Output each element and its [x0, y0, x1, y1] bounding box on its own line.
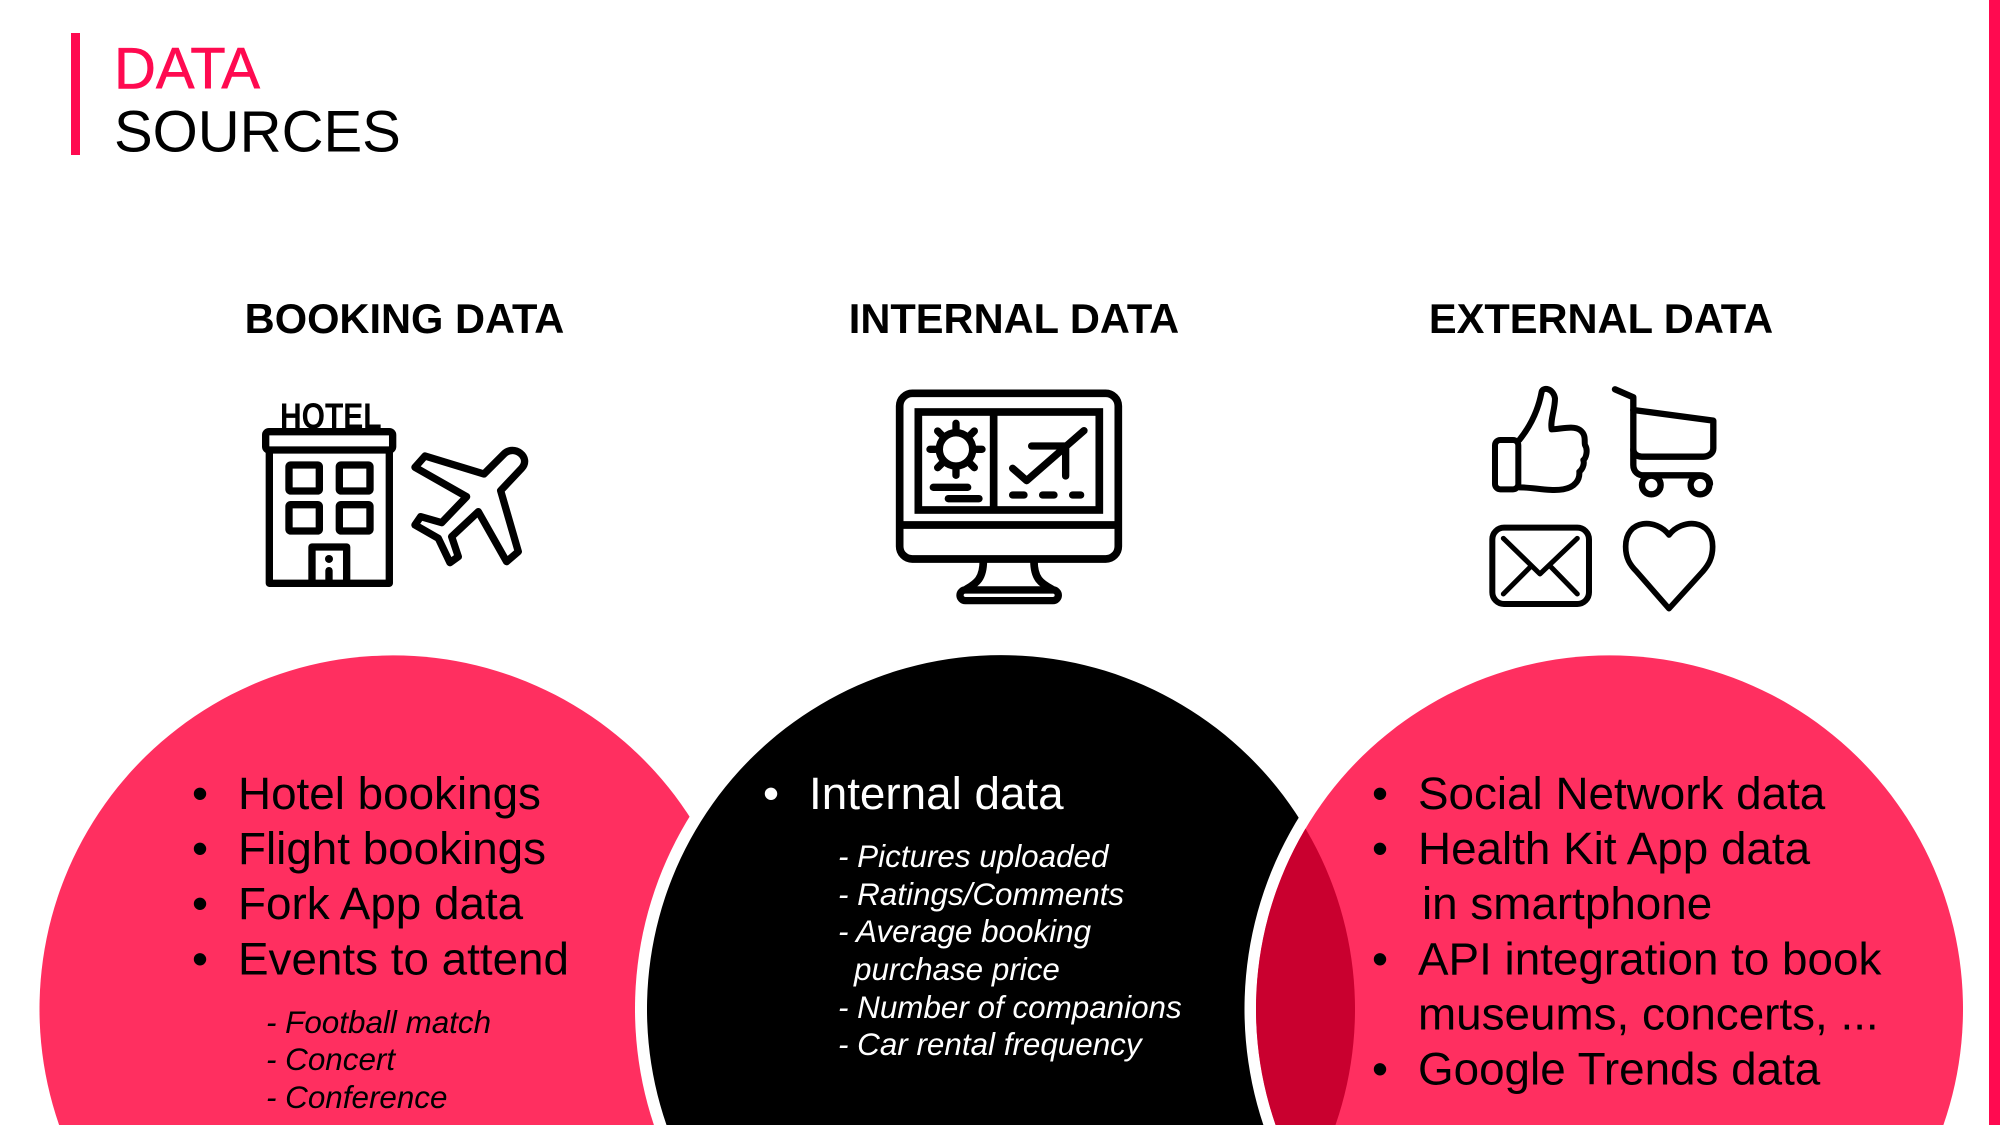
external data list: in smartphone: [1422, 878, 1712, 929]
external data list: •: [1372, 768, 1388, 819]
title: SOURCES: [114, 100, 401, 164]
external data list: Google Trends data: [1418, 1044, 1821, 1095]
internal data sub-list: [838, 839, 1182, 1062]
overlap lens: [1256, 828, 1355, 1125]
booking data list: •: [192, 934, 208, 985]
booking data list: •: [192, 768, 208, 819]
title accent bar: [71, 33, 80, 155]
external data list: •: [1372, 1044, 1388, 1095]
panel: external data circle: [1244, 644, 1974, 1125]
booking data list: •: [192, 878, 208, 929]
icon: computer monitor: [900, 393, 1118, 601]
heading: booking data: BOOKING DATA: [245, 295, 564, 342]
booking data sub-list: - Football match: [266, 1005, 491, 1040]
external data list: Health Kit App data: [1418, 823, 1811, 874]
external data list: [1372, 768, 1881, 1095]
icon: hotel: [266, 395, 393, 583]
internal data sub-list: - Number of companions: [838, 990, 1182, 1025]
booking data sub-list: - Concert: [266, 1042, 396, 1077]
booking data sub-list: [266, 1005, 491, 1115]
icon: hotel: HOTEL: [280, 395, 382, 436]
external data list: API integration to book: [1418, 934, 1881, 985]
icon: envelope: [1492, 528, 1589, 604]
internal data list: •: [763, 768, 779, 819]
internal data sub-list: - Average booking: [838, 914, 1092, 949]
booking data sub-list: - Conference: [266, 1080, 447, 1115]
right edge accent bar: [1989, 0, 2000, 1125]
booking data list: [192, 768, 569, 985]
panel: internal data circle: [635, 643, 1367, 1125]
booking data list: •: [192, 823, 208, 874]
external data list: •: [1372, 823, 1388, 874]
booking data list: Hotel bookings: [238, 768, 541, 819]
internal data sub-list: - Ratings/Comments: [838, 877, 1124, 912]
booking data list: Events to attend: [238, 934, 569, 985]
external data list: •: [1372, 934, 1388, 985]
icon: shopping cart: [1615, 389, 1713, 494]
panel: booking data circle: [39, 655, 747, 1125]
internal data sub-list: purchase price: [853, 952, 1060, 987]
external data list: museums, concerts, ...: [1418, 989, 1879, 1040]
title: DATA: [114, 36, 260, 102]
icon: thumbs up: [1495, 389, 1587, 490]
external data list: Social Network data: [1418, 768, 1826, 819]
heading: external data: EXTERNAL DATA: [1429, 295, 1773, 342]
icon: heart: [1626, 524, 1713, 609]
icon: airplane: [415, 450, 525, 563]
title: [114, 36, 401, 164]
heading: internal data: INTERNAL DATA: [849, 295, 1179, 342]
internal data sub-list: - Pictures uploaded: [838, 839, 1110, 874]
internal data list: Internal data: [809, 768, 1064, 819]
internal data sub-list: - Car rental frequency: [838, 1027, 1144, 1062]
booking data list: Flight bookings: [238, 823, 546, 874]
booking data list: Fork App data: [238, 878, 524, 929]
